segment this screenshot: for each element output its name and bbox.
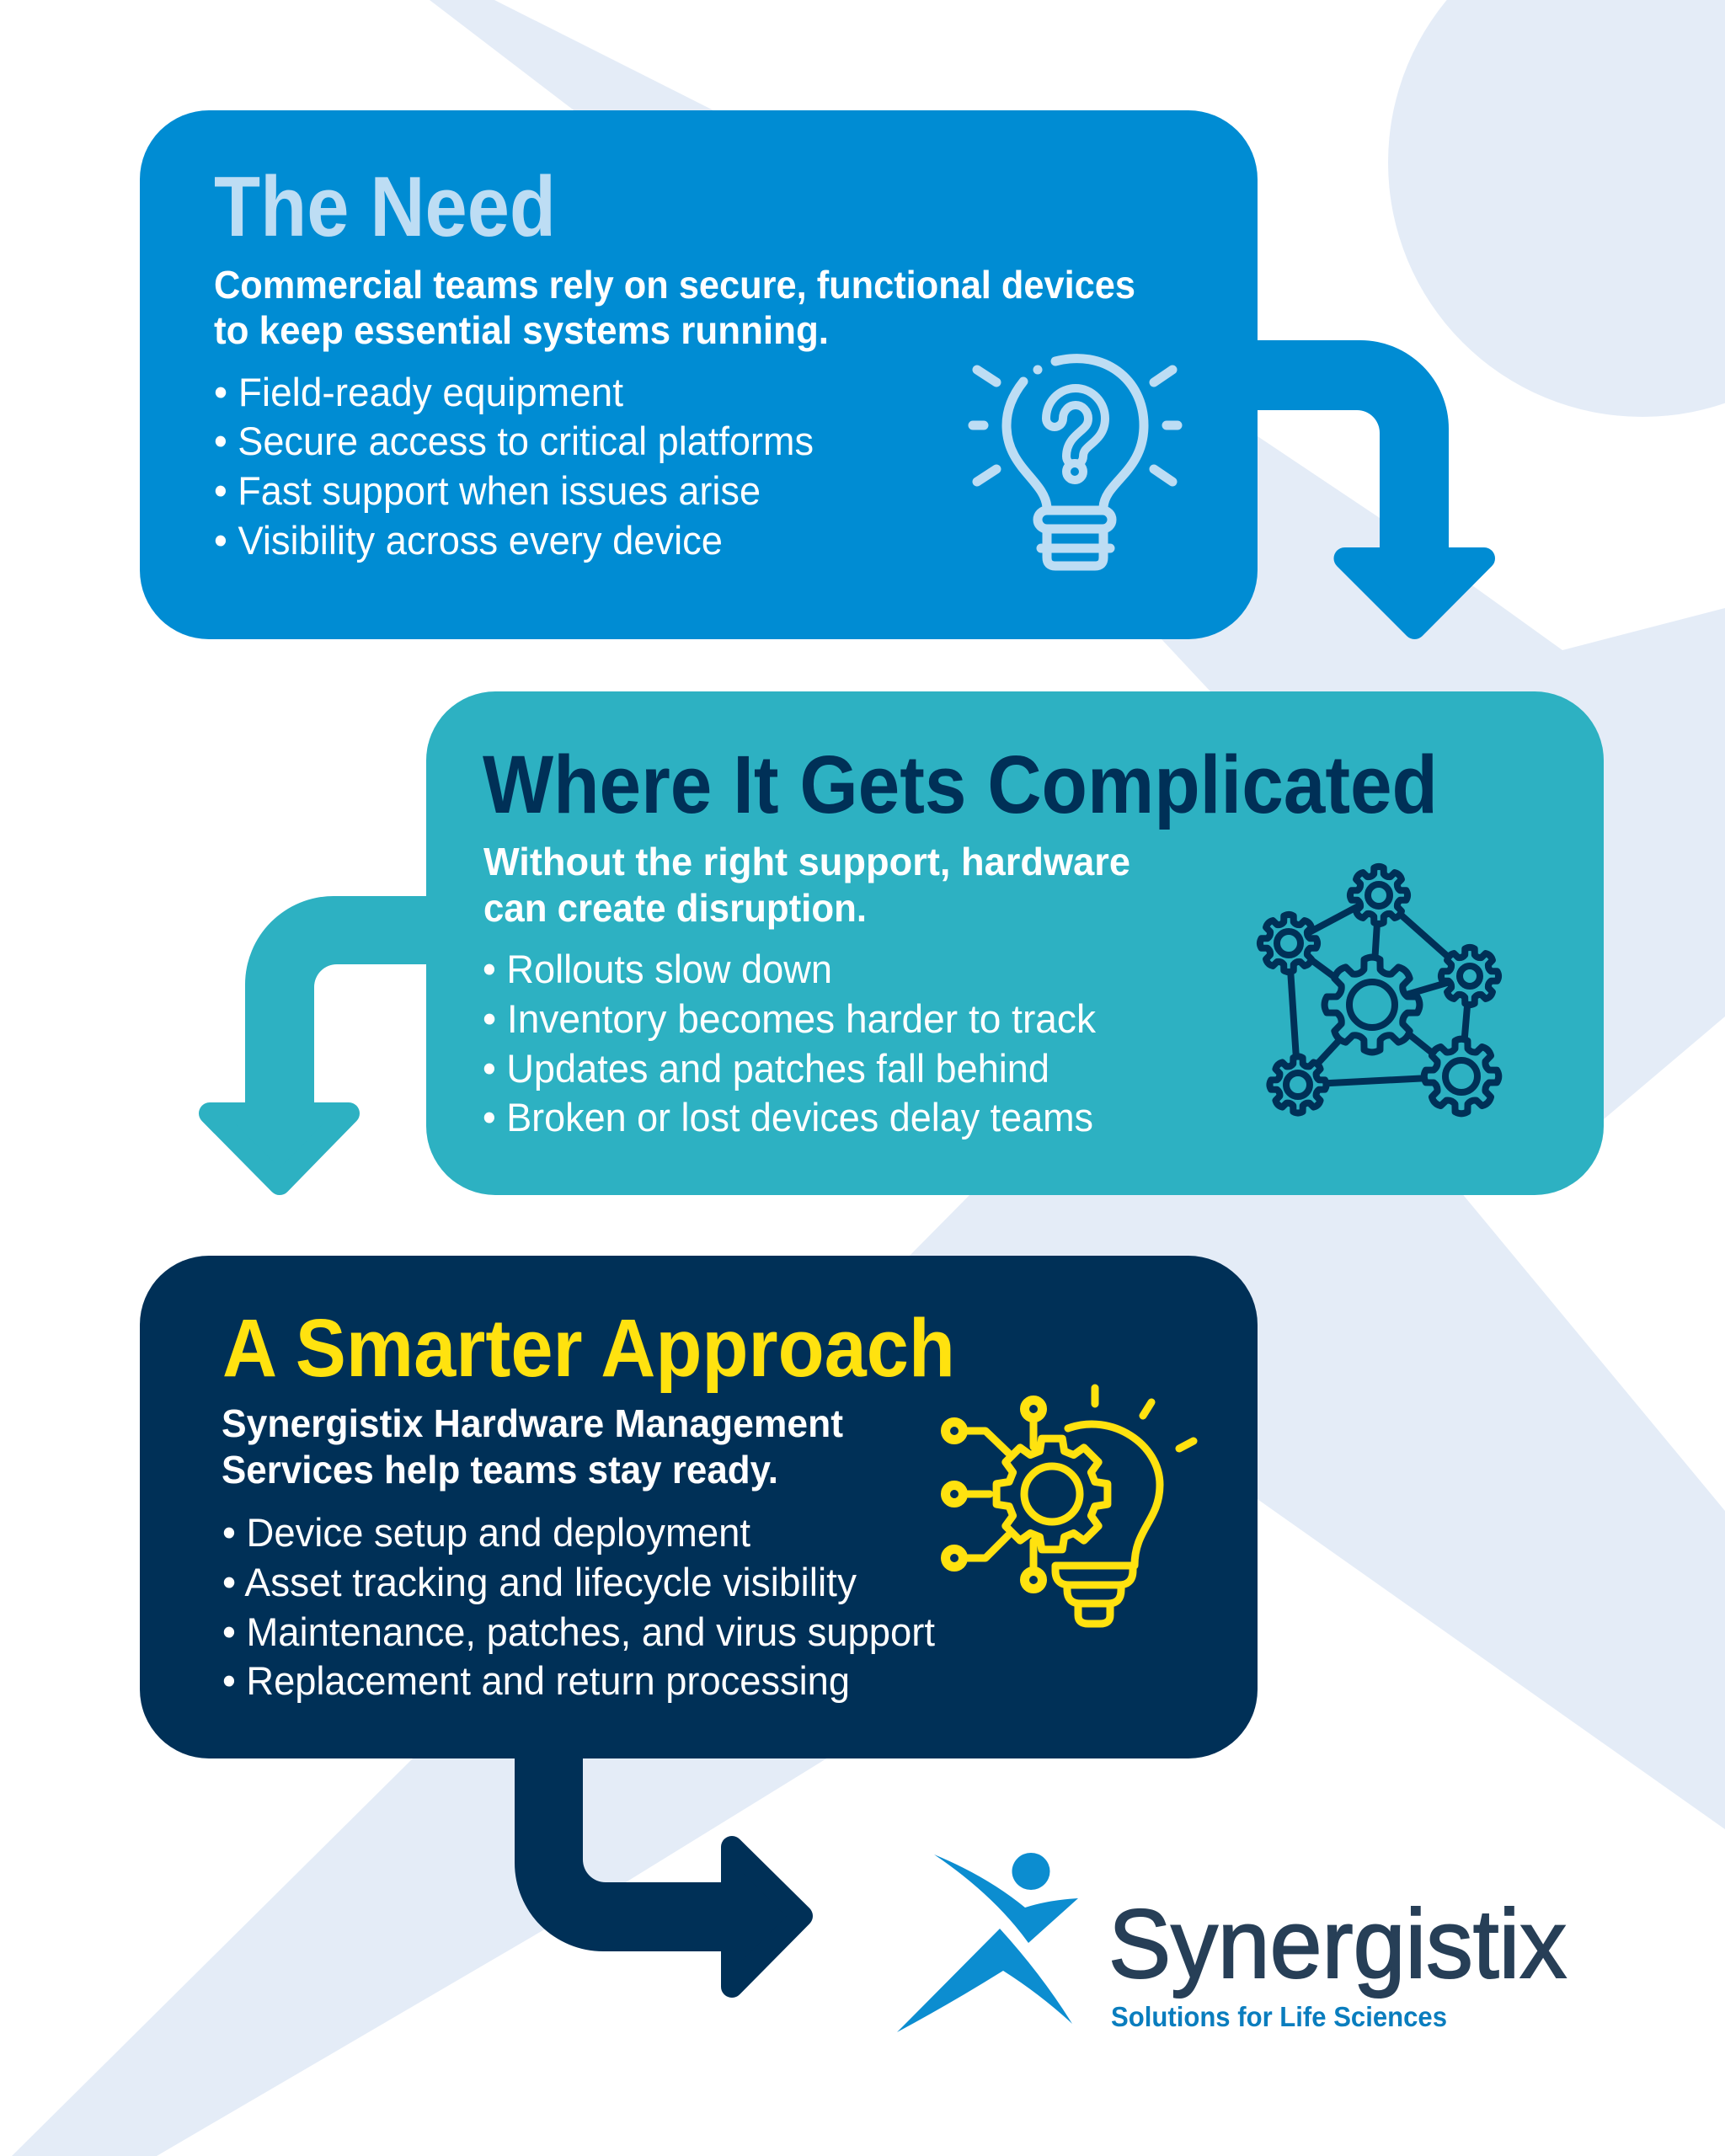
bullet list: approach: • Device setup and deployment bbox=[222, 1510, 750, 1555]
panel: a smarter approach bbox=[140, 1256, 1258, 1758]
bullet list: complicated: • Broken or lost devices delay teams bbox=[483, 1095, 1093, 1139]
arrow: need to complication bbox=[1251, 340, 1484, 628]
bullet list: approach: • Asset tracking and lifecycle visibility bbox=[222, 1560, 857, 1604]
bullet list: the need: • Secure access to critical platforms bbox=[214, 419, 814, 463]
bullet list: approach bbox=[222, 1510, 935, 1703]
bullet list: the need: • Field-ready equipment bbox=[214, 370, 623, 414]
intro text: complicated bbox=[483, 840, 1130, 930]
intro text: the need: Commercial teams rely on secure, functional devices bbox=[214, 263, 1135, 307]
intro text: complicated: can create disruption. bbox=[483, 886, 867, 930]
logo mark: figure bbox=[897, 1853, 1078, 2032]
intro text: the need bbox=[214, 263, 1135, 352]
panel: where it gets complicated bbox=[426, 691, 1604, 1195]
arrow: complication to approach bbox=[210, 896, 434, 1184]
intro text: complicated: Without the right support, hardware bbox=[483, 840, 1130, 883]
intro text: approach: Services help teams stay ready. bbox=[222, 1448, 778, 1492]
bullet list: complicated: • Inventory becomes harder to track bbox=[483, 996, 1096, 1041]
bullet list: complicated bbox=[483, 947, 1096, 1139]
intro text: approach: Synergistix Hardware Management bbox=[222, 1401, 843, 1445]
heading: where it gets complicated: Where It Gets Complicated bbox=[483, 739, 1438, 830]
bullet list: complicated: • Rollouts slow down bbox=[483, 947, 832, 991]
panel: the need bbox=[140, 110, 1258, 639]
icon: lightbulb with question mark bbox=[973, 359, 1178, 566]
logo tagline: Solutions for Life Sciences bbox=[1111, 2001, 1447, 2032]
logo: synergistix bbox=[897, 1853, 1567, 2032]
heading: the need: The Need bbox=[214, 160, 556, 254]
bullet list: the need: • Fast support when issues arise bbox=[214, 468, 761, 513]
bullet list: approach: • Replacement and return processing bbox=[222, 1658, 850, 1703]
intro text: approach bbox=[222, 1401, 843, 1492]
heading: a smarter approach: A Smarter Approach bbox=[222, 1302, 955, 1394]
arrow: approach to logo bbox=[515, 1752, 802, 1987]
intro text: the need: to keep essential systems running. bbox=[214, 308, 829, 352]
bullet list: complicated: • Updates and patches fall behind bbox=[483, 1046, 1049, 1091]
bullet list: the need bbox=[214, 370, 814, 563]
icon: lightbulb with gear and circuit bbox=[945, 1388, 1194, 1624]
icon: connected gears bbox=[1260, 867, 1498, 1113]
logo wordmark: Synergistix bbox=[1108, 1889, 1567, 1999]
bullet list: the need: • Visibility across every device bbox=[214, 518, 723, 563]
bullet list: approach: • Maintenance, patches, and virus support bbox=[222, 1609, 935, 1654]
